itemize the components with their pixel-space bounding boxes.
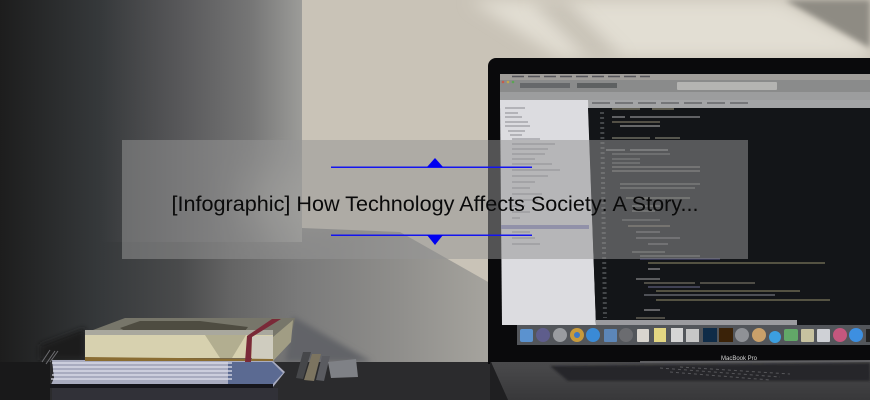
pens and eraser [296, 352, 358, 381]
tab strip [500, 92, 870, 108]
notebook [50, 360, 285, 387]
file sidebar [500, 100, 596, 325]
laptop lid [488, 58, 870, 364]
book stack [42, 318, 295, 400]
toolbar [500, 80, 870, 92]
keyboard base [491, 362, 870, 400]
book shadow on wall [285, 316, 372, 362]
dock icons [520, 328, 870, 343]
code editor [588, 108, 870, 325]
translucent title band [122, 140, 748, 259]
hinge highlight [640, 360, 870, 363]
hardcover book [85, 318, 295, 345]
horizontal scrollbar [596, 320, 797, 325]
title: [Infographic] How Technology Affects Society: A Story... [172, 191, 698, 216]
table [0, 362, 870, 400]
dock [517, 325, 870, 345]
menu bar [500, 74, 870, 80]
laptop [488, 58, 870, 400]
spiral binding [42, 350, 58, 364]
MacBook Pro label: MacBook Pro [721, 356, 758, 362]
keyboard keys [550, 363, 870, 381]
red elastic band [245, 319, 281, 362]
